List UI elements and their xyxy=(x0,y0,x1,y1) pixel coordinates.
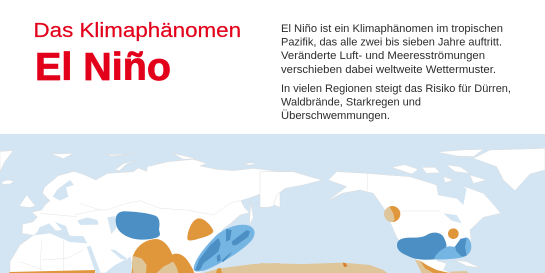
land: British Isles xyxy=(19,195,35,208)
title line: El Niño: El Niño xyxy=(35,46,171,89)
region: southeast US drought xyxy=(448,228,459,239)
region: Gulf rainfall light xyxy=(433,237,471,259)
title line: Das Klimaphänomen: Das Klimaphänomen xyxy=(34,20,241,42)
paragraph: risks: In vielen Regionen steigt das Risiko für Dürren, xyxy=(281,83,511,95)
paragraph: risks xyxy=(281,83,511,122)
region: west coast drought xyxy=(384,206,400,222)
region: Central America drought orange xyxy=(420,261,450,273)
land: North America xyxy=(327,172,501,273)
region: small Pacific drought spot xyxy=(343,263,347,267)
paragraph: risks: Waldbrände, Starkregen und xyxy=(281,96,421,108)
west coast tan part xyxy=(385,207,395,222)
western half of map xyxy=(0,151,280,273)
East Asia light blue area xyxy=(194,225,255,272)
region: Central Asia rainfall xyxy=(116,211,160,240)
region: tropical Pacific band west xyxy=(203,263,280,273)
region: Pacific band east xyxy=(260,263,387,273)
land: Cuba xyxy=(455,260,481,268)
region: Indonesia spot xyxy=(216,268,222,273)
seas: Mediterranean, Black Sea, Caspian, Baltic, Red Sea, Persian Gulf xyxy=(33,180,132,273)
paragraph: El Niño description: verschieben dabei weltweite Wettermuster. xyxy=(281,64,496,76)
land: Canadian arctic islands xyxy=(392,149,487,183)
land: arctic islands xyxy=(0,151,257,172)
region: southern US rainfall dark xyxy=(397,233,447,260)
land: Iceland xyxy=(1,180,14,184)
paragraph: El Niño description: Pazifik, das alle zwei bis sieben Jahre auftritt. xyxy=(281,36,502,48)
land: Europe, Asia, Africa xyxy=(10,159,280,273)
seas: Hudson Bay and Great Lakes xyxy=(438,185,467,223)
region: Africa drought strip xyxy=(9,270,95,273)
paragraph: El Niño description: El Niño ist ein Klimaphänomen im tropischen xyxy=(281,23,503,35)
title xyxy=(34,20,241,89)
world map xyxy=(0,134,545,273)
region: Mexico drought tan xyxy=(415,260,435,273)
eastern half of map xyxy=(260,148,545,273)
India tan, Bay of Bengal xyxy=(157,262,178,273)
border: US-Canada xyxy=(367,173,440,211)
paragraph: El Niño description: Veränderte Luft- und Meeresströmungen xyxy=(281,50,485,62)
region: Central America tan xyxy=(450,271,469,273)
region: Florida rainfall dark xyxy=(455,238,467,257)
intro text xyxy=(281,23,511,122)
paragraph: risks: Überschwemmungen. xyxy=(281,110,390,122)
land: Greenland xyxy=(473,148,545,191)
India orange area xyxy=(132,239,194,273)
East Asia dark blue land overlap xyxy=(195,229,250,271)
India tan over ocean, west xyxy=(132,256,147,273)
map ocean background xyxy=(0,134,545,273)
land: eastern Siberia xyxy=(260,172,322,207)
land: Kamchatka xyxy=(271,192,280,207)
paragraph: El Niño description xyxy=(281,23,503,76)
country borders xyxy=(20,201,240,273)
west coast orange circle xyxy=(384,206,400,222)
region: East Asia rainfall xyxy=(194,225,255,272)
region: India drought xyxy=(132,239,194,273)
land: Sakhalin xyxy=(249,203,253,225)
region: China drought xyxy=(187,218,213,240)
